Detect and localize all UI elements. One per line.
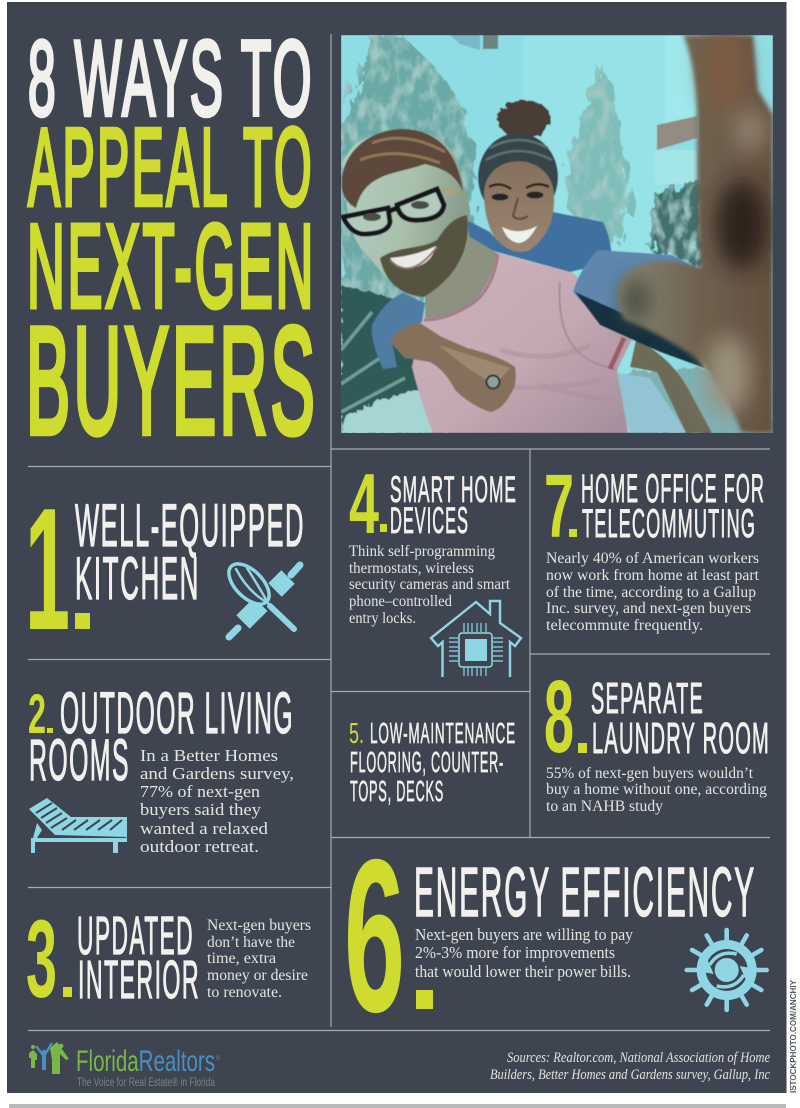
heading [75,492,305,612]
number 5: 5. [349,718,364,750]
item 5: low-maintenance flooring [349,718,516,808]
body text [140,746,294,856]
logo icon [29,1042,69,1074]
icon: smart house with chip [431,601,521,677]
body text: don’t have the [207,934,295,951]
body text: Inc. survey, and next-gen buyers [546,600,751,617]
text: APPEAL TO [28,106,314,229]
icon: energy gear [687,930,767,1010]
body text: money or desire [207,967,308,984]
body text [207,917,311,1001]
item 2: outdoor living rooms [28,681,294,856]
title [26,18,318,466]
logo wordmark: FloridaRealtors [76,1045,215,1078]
body text: 55% of next-gen buyers wouldn’t [546,765,754,782]
body text [349,543,511,627]
text: 8 WAYS TO [28,18,314,138]
heading [29,681,294,793]
heading: KITCHEN [75,545,200,612]
item 3: updated interior: INTERIOR [78,950,200,1010]
number 7: 7 [544,457,574,557]
body text: Next-gen buyers are willing to pay [415,925,634,944]
body text: 2%-3% more for improvements [415,943,615,962]
man's head [342,129,470,297]
body text: Next-gen buyers [207,917,311,934]
shirt [412,253,633,433]
heading [77,906,200,1010]
photo credit: ISTOCKPHOTO.COM/ANCHIY [788,980,798,1093]
number 3: 3 [26,898,57,1021]
trees and garden [341,35,772,433]
body text: In a Better Homes [140,746,278,765]
body text: now work from home at least part [546,567,760,584]
item 6: energy efficiency [344,815,767,1058]
item 3: updated interior: UPDATED [77,906,194,966]
item 8: separate laundry room [544,659,770,815]
body text: thermostats, wireless [349,560,474,577]
body text: 77% of next-gen [140,782,260,801]
item 3: updated interior [26,898,311,1021]
heading [350,718,516,808]
icon: whisk and rolling pin [222,557,300,637]
number 8: 8 [544,659,574,774]
logo: Florida Realtors: ® [216,1055,221,1062]
text: BUYERS [26,296,318,466]
body text: Think self-programming [349,543,495,560]
woman: bun, hair, face [478,100,558,254]
body text [415,925,634,981]
body text: Nearly 40% of American workers [546,550,759,567]
woman's hand on chest [390,323,516,412]
body text: phone–controlled [349,593,452,610]
icon: sun lounger [29,798,127,853]
woman's other arm [630,340,712,433]
body text: telecommute frequently. [546,617,703,634]
man's neck [425,235,497,318]
text: OUTDOOR LIVING [60,681,294,746]
body text: buyers said they [140,800,262,819]
item 1: well-equipped kitchen [25,471,305,666]
heading [591,674,770,763]
body text: of the time, according to a Gallup [546,584,756,601]
number 6: 6 [344,815,405,1058]
body text: to renovate. [207,984,282,1001]
heading [581,467,765,546]
denim behind shoulders [467,212,612,272]
body text: and Gardens survey, [140,764,294,783]
body text: outdoor retreat. [140,837,259,856]
body text [546,550,760,634]
number 2: 2 [28,682,46,745]
sources [490,1050,770,1083]
body text: time, extra [207,950,276,967]
photo: selfie of a young couple [341,25,773,433]
number 4: 4 [349,457,379,552]
logo: Florida Realtors [29,1042,221,1089]
body text: to an NAHB study [546,798,663,815]
number 1: 1 [25,471,70,666]
footer band [9,1104,786,1108]
body text: entry locks. [349,610,416,627]
number 7 [544,457,577,557]
body text: security cameras and smart [349,576,511,593]
body text: that would lower their power bills. [415,962,631,981]
text: SMART HOME [390,469,517,510]
text: LOW-MAINTENANCE [370,718,516,750]
logo tagline: The Voice for Real Estate® in Florida [77,1077,215,1089]
body text: wanted a relaxed [140,819,269,838]
text: WELL-EQUIPPED [75,492,305,559]
number 1 [25,471,90,666]
text: FLOORING, COUNTER- [350,747,504,779]
item 4: smart home devices [349,457,521,677]
body text [546,765,767,815]
item 7: home office for telecommuting [544,457,765,634]
heading: TOPS, DECKS [350,776,444,808]
heading: ROOMS [29,728,130,793]
trousers [617,372,686,433]
heading: DEVICES [390,500,469,541]
woman's denim sleeve [372,293,425,369]
body text: buy a home without one, according [546,781,767,798]
heading [390,469,517,541]
wall background [341,35,773,433]
man's raised arm and hand [573,25,773,433]
text: NEXT-GEN [27,200,316,333]
